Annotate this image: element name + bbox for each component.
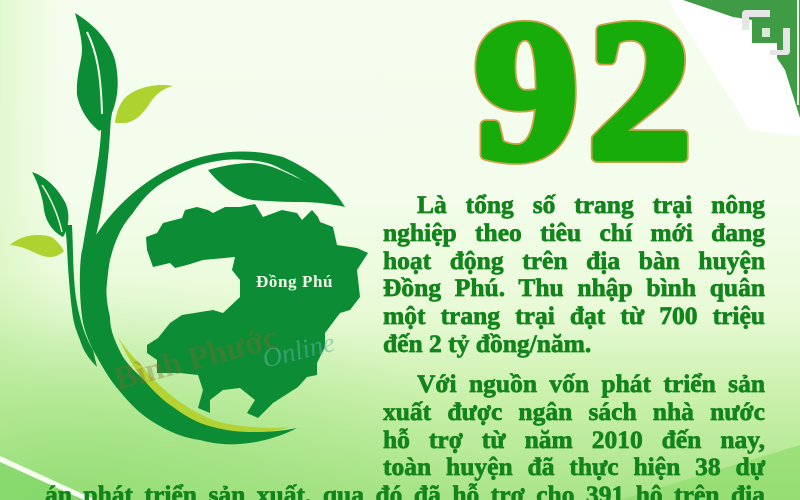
watermark: Bình Phước [111, 320, 282, 398]
paragraph 2: toàn huyện đã thực hiện 38 dự [383, 452, 765, 481]
top leaf [75, 13, 118, 131]
paragraph 1: một trang trại đạt từ 700 triệu [383, 301, 765, 330]
paragraph 1: đến 2 tỷ đồng/năm. [383, 329, 591, 358]
lime leaf left [10, 235, 64, 257]
crescent stem [80, 151, 345, 444]
paragraph 1: Là tổng số trang trại nông [417, 190, 765, 219]
lower left stem [65, 225, 97, 367]
watermark: Online [259, 327, 338, 374]
paragraph 2: hỗ trợ từ năm 2010 đến nay, [383, 425, 765, 454]
paragraph 1: hoạt động trên địa bàn huyện [383, 246, 765, 275]
paragraph 2: xuất được ngân sách nhà nước [383, 397, 765, 426]
paragraph 2: Với nguồn vốn phát triển sản [417, 369, 765, 398]
map label: Đồng Phú [256, 272, 333, 291]
arc leaf [208, 163, 345, 207]
paragraph 1: nghiệp theo tiêu chí mới đang [383, 218, 765, 247]
main stem [82, 115, 111, 252]
paragraph 1: Đồng Phú. Thu nhập bình quân [383, 273, 765, 302]
lime crescent [118, 337, 290, 432]
lime leaf top [115, 85, 173, 123]
map of Đồng Phú [146, 204, 368, 418]
small left leaf [32, 172, 68, 237]
